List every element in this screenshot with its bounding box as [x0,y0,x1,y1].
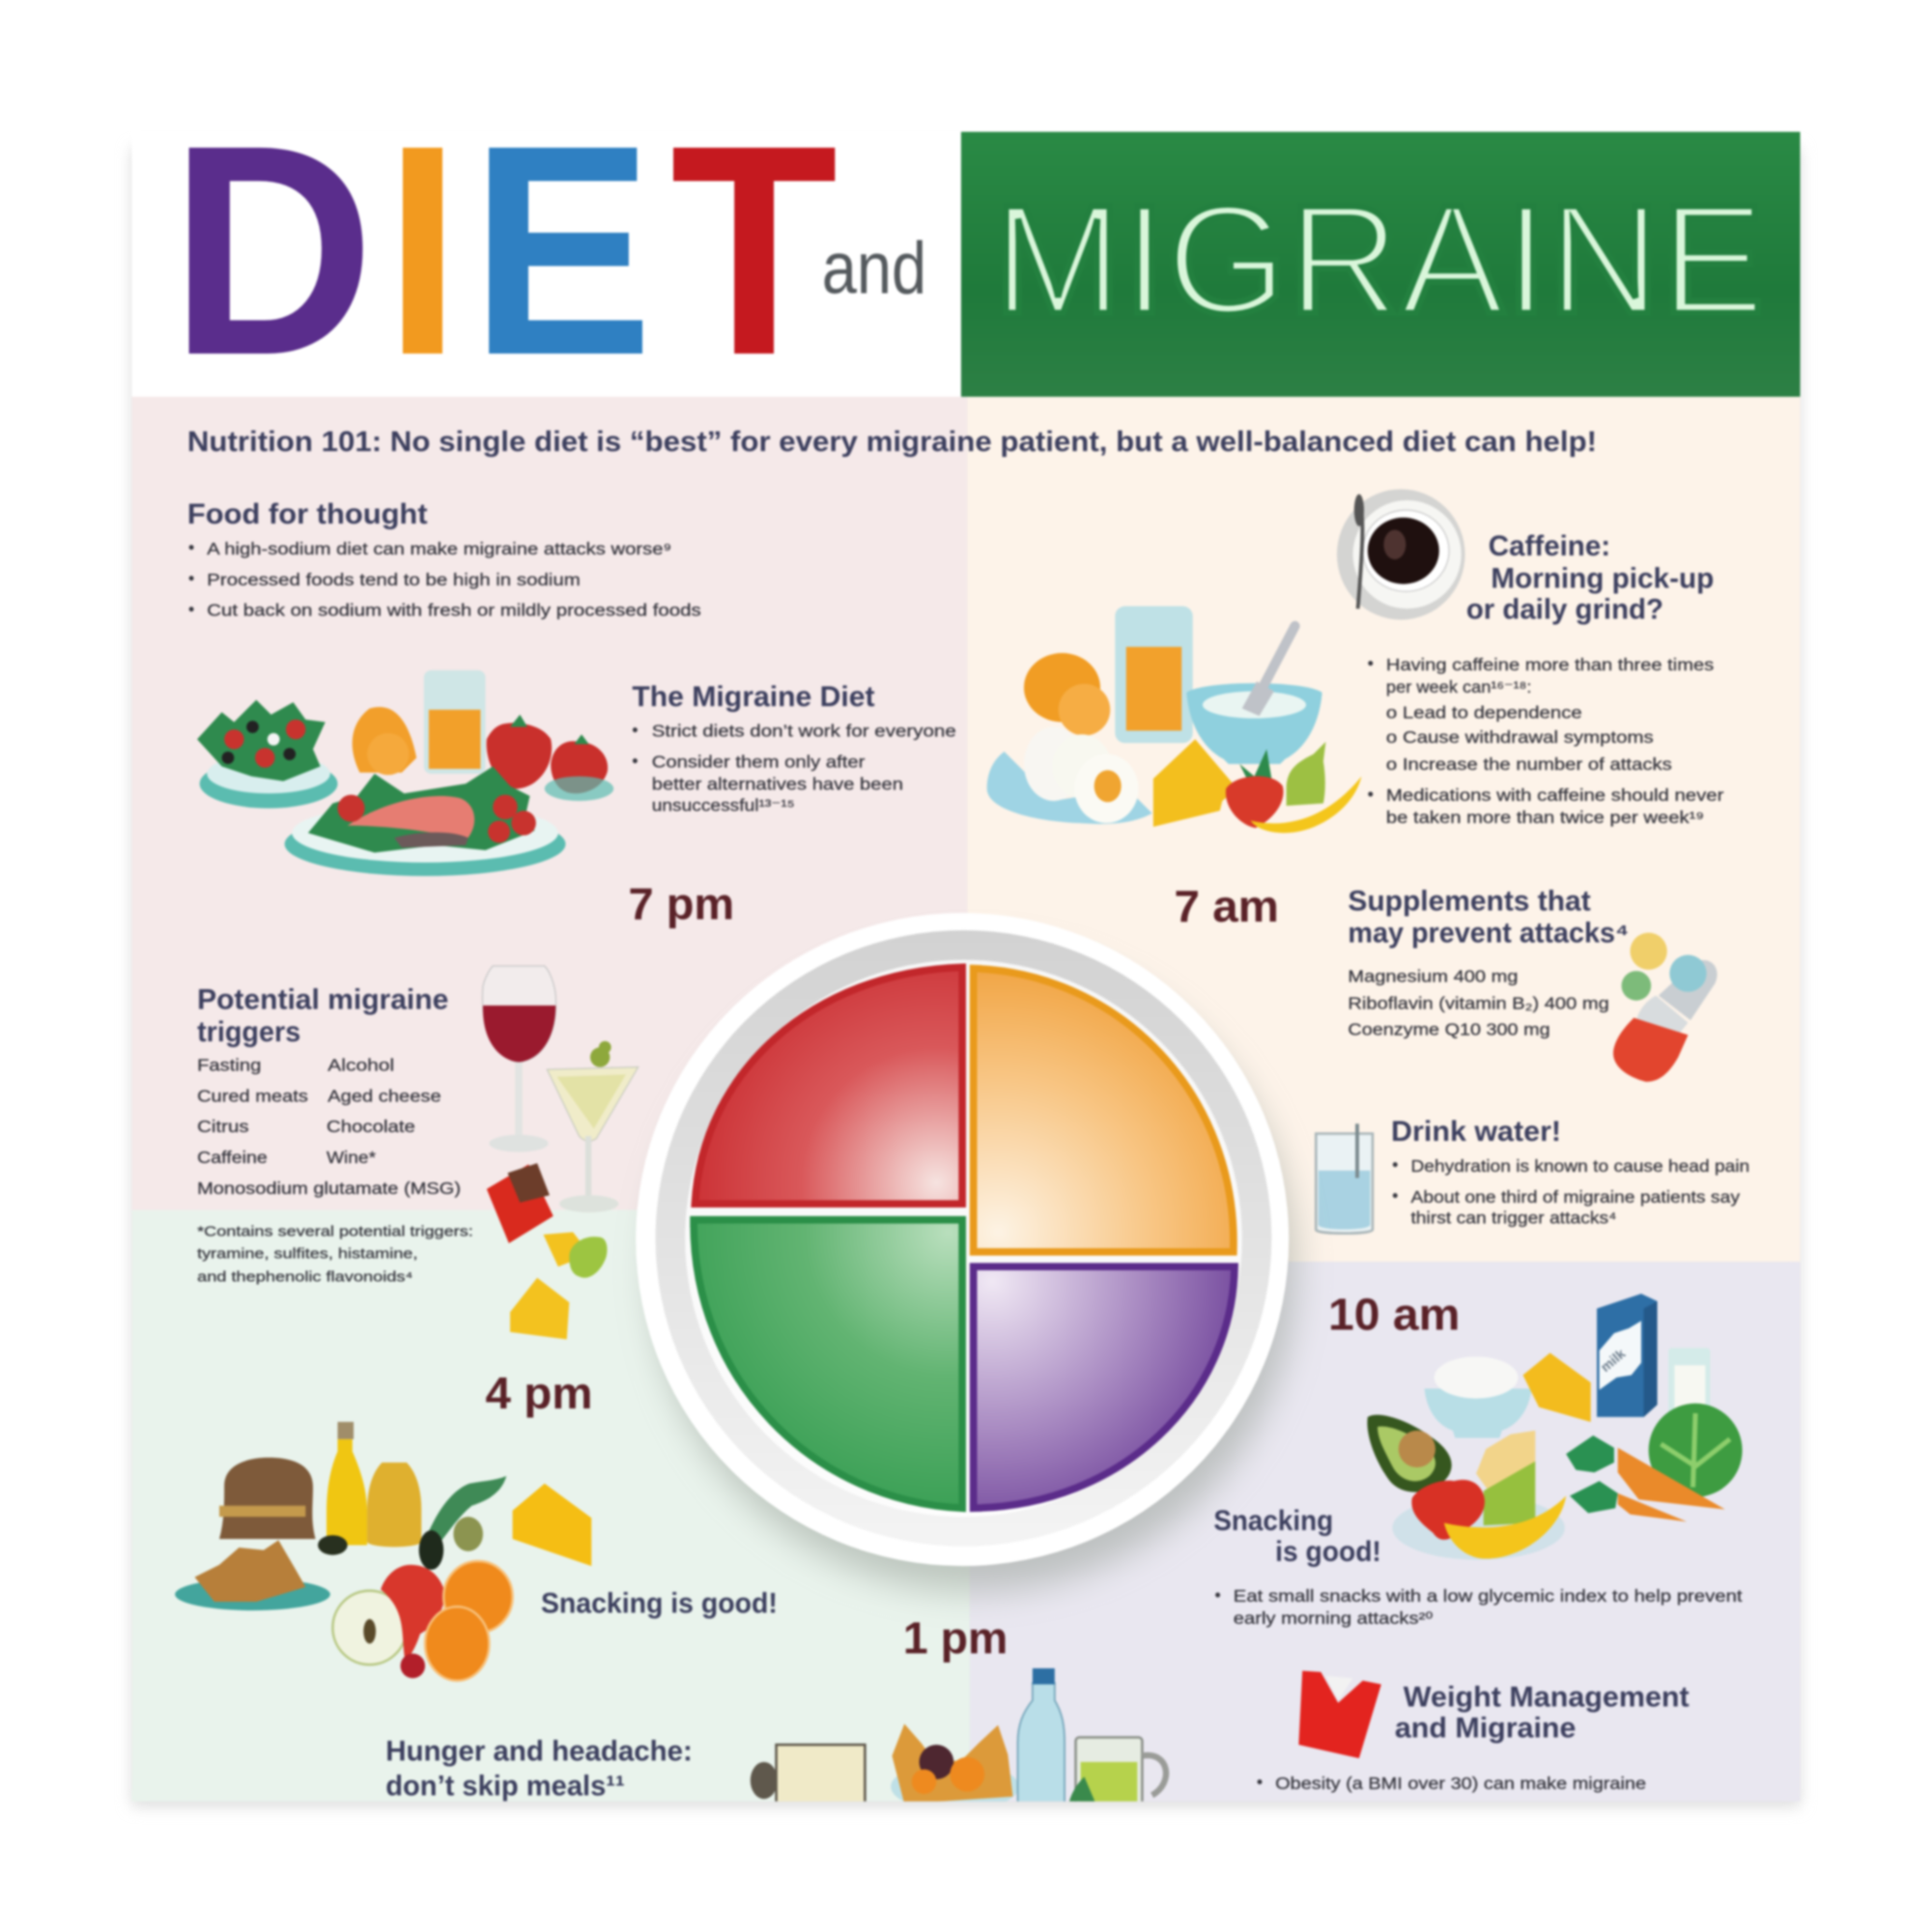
illustration: dinner foods [197,670,613,876]
text block: potential migraine triggers: Aged cheese [327,1086,441,1105]
text block: the migraine diet: The Migraine Diet [632,681,875,713]
text block: hunger and headache: Hunger and headache: [385,1736,693,1768]
text block: supplements: Magnesium 400 mg [1348,967,1518,986]
text block: the migraine diet [632,681,956,814]
text block: food for thought: Cut back on sodium with fresh or mildly processed foods [207,601,701,620]
text block: food for thought: Food for thought [187,498,428,530]
label: 1 pm: 1 pm [903,1613,1008,1663]
text block: drink water: Dehydration is known to cause head pain [1410,1156,1749,1176]
text block: caffeine bullets: • [1368,784,1374,804]
title: and: and [822,228,926,310]
text block: weight management: Obesity (a BMI over 30) can make migraine [1275,1774,1646,1793]
text block: caffeine bullets [1368,654,1724,827]
text block: food for thought: • [188,569,194,588]
title: DIET: T [670,82,838,417]
quadrant: green [694,1220,962,1508]
text block: drink water: • [1392,1155,1398,1175]
label: 4 pm: 4 pm [486,1368,593,1418]
text block: food for thought: Processed foods tend to be high in sodium [207,570,581,589]
text block: the migraine diet: • [632,720,638,739]
illustration: afternoon snack foods [175,1422,591,1681]
text block: caffeine heading: Caffeine: [1489,530,1610,562]
text block: caffeine bullets: o Lead to dependence [1386,703,1582,723]
text block: potential migraine triggers: Chocolate [327,1117,415,1136]
text block: the migraine diet: unsuccessful¹³⁻¹⁵ [652,795,795,814]
text block: weight management: • [1257,1773,1263,1792]
illustration: lunch foods [751,1668,1166,1816]
text block: weight management: Weight Management [1404,1682,1690,1714]
text block: supplements: Coenzyme Q10 300 mg [1348,1019,1550,1038]
text block: caffeine bullets: o Cause withdrawal symptoms [1386,727,1654,747]
header: white title area [131,131,962,398]
text block: weight management [1257,1682,1690,1793]
text block: snacking is good: is good! [1275,1536,1381,1568]
text block: snacking is good, afternoon: Snacking is good! [541,1588,778,1620]
panel: green afternoon section [131,1210,970,1802]
text block: drink water: thirst can trigger attacks⁴ [1410,1208,1616,1228]
icon: coffee cup [1337,489,1465,620]
text block: the migraine diet: better alternatives have been [652,775,903,794]
quadrant: red [695,967,962,1204]
title: MIGRAINE: MIGRAINE [993,174,1765,347]
panel: pink evening section [131,397,967,1212]
text block: potential migraine triggers: Monosodium glutamate (MSG) [197,1179,461,1198]
heading: nutrition 101: Nutrition 101: No single diet is “best” for every migraine patient, but a well-balanced diet can help! [187,426,1597,458]
illustration: mid-morning foods: milk [1598,1346,1629,1375]
illustration: breakfast foods [987,607,1361,833]
text block: supplements [1348,886,1629,1038]
text block: potential migraine triggers: Alcohol [327,1055,394,1074]
footnote [197,1224,473,1286]
text block: food for thought [187,498,701,620]
header: green migraine banner [961,131,1801,397]
text block: drink water: • [1392,1186,1398,1206]
text block: the migraine diet: • [632,751,638,770]
title: DIET: E [470,82,653,417]
text block: caffeine bullets: Having caffeine more than three times [1386,655,1714,674]
icon: water glass [1316,1123,1373,1234]
text block: caffeine heading: Morning pick-up [1491,562,1714,594]
title: DIET: I [384,82,461,417]
icon: supplement capsule and pills [1613,933,1718,1082]
panel shadow [131,148,1801,1806]
illustration: trigger foods [482,966,639,1339]
text block: the migraine diet: Consider them only after [652,753,866,772]
text block: hunger and headache: don’t skip meals¹¹ [385,1770,625,1802]
text block: potential migraine triggers [197,984,461,1198]
text block: caffeine bullets: o Increase the number of attacks [1386,754,1672,774]
title: DIET [170,82,838,417]
text block: food for thought: • [188,538,194,557]
text block: caffeine heading [1466,530,1714,625]
illustration: mid-morning foods [1367,1293,1743,1560]
panel: lavender mid-morning section [970,1262,1801,1802]
text block: caffeine bullets: be taken more than twice per week¹⁹ [1386,808,1704,827]
text block: caffeine heading: or daily grind? [1466,593,1663,625]
text block: food for thought: • [188,599,194,618]
text block: potential migraine triggers: triggers [197,1016,300,1048]
text block: snacking is good [1213,1505,1743,1628]
footnote: and thephenolic flavonoids⁴ [197,1270,412,1286]
text block: potential migraine triggers: Citrus [197,1117,249,1136]
text block: supplements: Riboflavin (vitamin B₂) 400 mg [1348,994,1609,1013]
text block: caffeine bullets: per week can¹⁶⁻¹⁸: [1386,677,1531,696]
quadrant: orange [974,969,1234,1252]
text block: snacking is good: Eat small snacks with a low glycemic index to help prevent [1234,1586,1743,1605]
text block: the migraine diet: Strict diets don’t work for everyone [652,722,956,741]
text block: caffeine bullets: Medications with caffeine should never [1386,785,1724,805]
text block: food for thought: A high-sodium diet can make migraine attacks worse⁹ [207,539,671,558]
text block: potential migraine triggers: Wine* [327,1148,376,1167]
quadrant: purple [974,1266,1235,1508]
text block: potential migraine triggers: Potential migraine [197,984,448,1016]
text block: supplements: Supplements that [1348,886,1591,918]
text block: drink water: Drink water! [1391,1116,1561,1148]
footnote: *Contains several potential triggers: [197,1224,473,1239]
text block: potential migraine triggers: Caffeine [197,1148,268,1167]
chart: plate with four quadrants [636,913,1296,1592]
text block: drink water [1391,1116,1749,1228]
text block: potential migraine triggers: Cured meats [197,1086,308,1105]
text block: snacking is good: early morning attacks²⁰ [1234,1608,1434,1628]
text block: snacking is good: • [1215,1585,1221,1605]
text block: drink water: About one third of migraine patients say [1410,1187,1740,1207]
text block: snacking is good: Snacking [1213,1505,1333,1537]
text block: supplements: may prevent attacks⁴ [1348,918,1629,950]
footnote: tyramine, sulfites, histamine, [197,1246,417,1262]
text block: weight management: and Migraine [1395,1712,1576,1744]
label: 10 am: 10 am [1328,1289,1460,1339]
text block: potential migraine triggers: Fasting [197,1055,261,1074]
panel: peach morning section [967,397,1801,1262]
label: 7 pm: 7 pm [629,879,734,929]
text block: caffeine bullets: • [1368,654,1374,673]
title: DIET: D [170,82,375,417]
label: 7 am: 7 am [1175,881,1279,931]
icon: red bathroom scale [1298,1671,1381,1758]
text block: hunger and headache [385,1736,693,1802]
